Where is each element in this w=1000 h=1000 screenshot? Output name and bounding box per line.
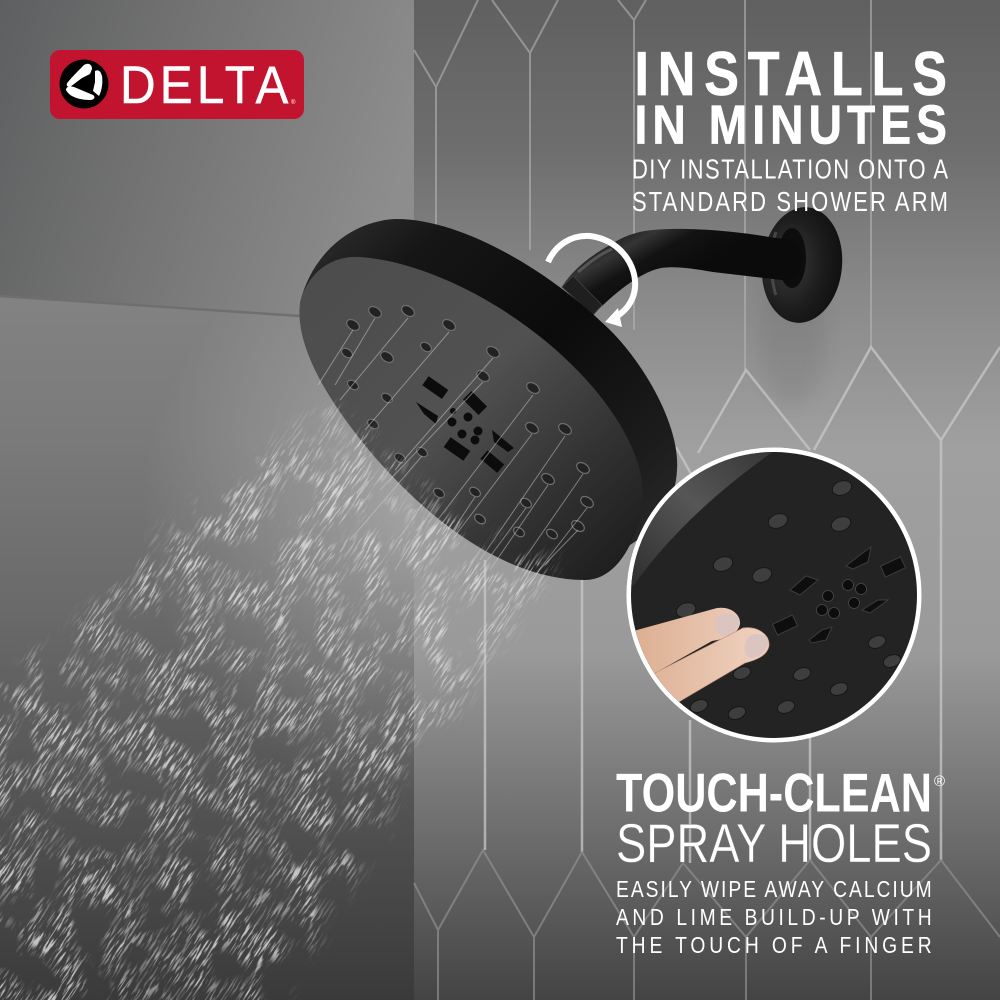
Delta logo: ® — [291, 99, 296, 106]
head rim — [300, 219, 677, 560]
water jets from nozzles — [318, 318, 587, 590]
shower head — [299, 219, 677, 580]
head face — [299, 257, 643, 580]
Delta logo — [50, 50, 304, 119]
text: easily wipe away: THE TOUCH OF A FINGER — [616, 932, 932, 958]
text: easily wipe away: AND LIME BUILD-UP WITH — [616, 904, 932, 930]
water spray — [0, 400, 562, 1000]
fingers — [636, 608, 770, 702]
left wall background — [0, 0, 414, 1000]
inset nozzles — [674, 478, 903, 722]
inset centre dots — [816, 580, 866, 618]
heading: touch-clean spray holes — [616, 762, 945, 874]
flange — [756, 203, 848, 327]
arm highlight — [578, 249, 612, 272]
arm — [562, 229, 802, 315]
heading: installs in minutes: INSTALLS — [634, 40, 947, 109]
text: DIY installation: DIY INSTALLATION ONTO A — [632, 154, 948, 185]
heading: installs in minutes: IN MINUTES — [634, 94, 947, 155]
central slot cluster — [416, 376, 514, 473]
inset slots — [772, 547, 906, 643]
text: DIY installation — [632, 154, 948, 218]
heading: touch-clean spray holes: ® — [934, 773, 945, 790]
heading: installs in minutes — [634, 40, 947, 155]
right wall: picket tile pattern — [414, 0, 1000, 1000]
wall shadow under flange — [758, 265, 826, 405]
inset circle: finger on spray holes — [620, 440, 930, 750]
text: DIY installation: STANDARD SHOWER ARM — [632, 187, 948, 218]
text: easily wipe away: EASILY WIPE AWAY CALCIUM — [616, 876, 932, 902]
text: easily wipe away — [616, 876, 932, 958]
inset rim band — [631, 452, 772, 586]
logo emblem — [60, 60, 108, 108]
rotation arrow — [548, 236, 635, 327]
arm thread — [562, 276, 602, 315]
shower arm and wall flange — [562, 203, 848, 327]
logo wordmark: DELTA — [120, 55, 289, 114]
spray nozzles — [340, 303, 595, 541]
heading: touch-clean spray holes: SPRAY HOLES — [616, 812, 932, 874]
